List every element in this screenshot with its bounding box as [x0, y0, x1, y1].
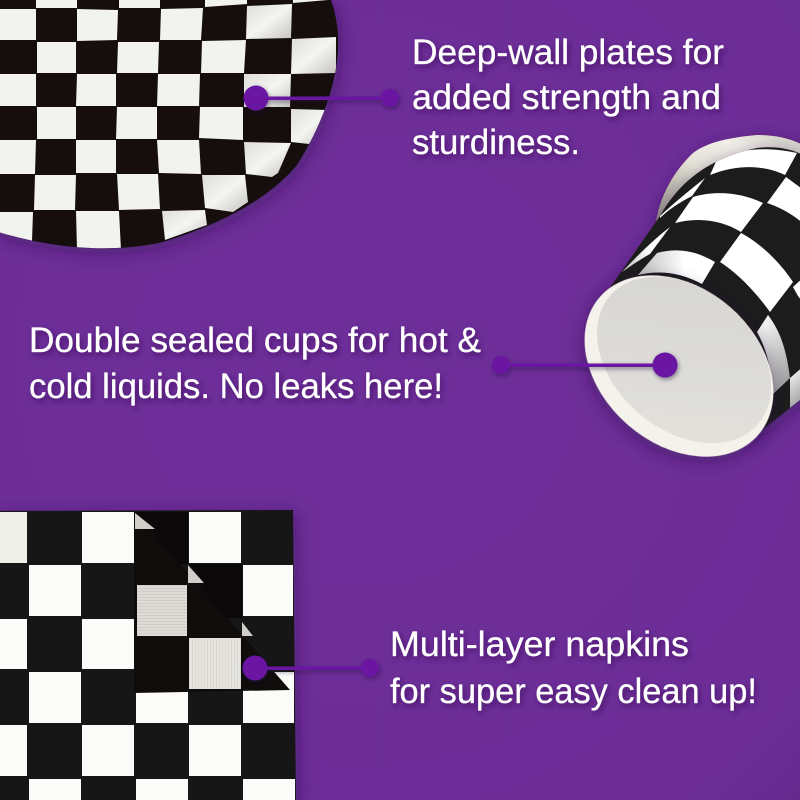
text: plates: Deep-wall plates for	[412, 33, 724, 72]
folded napkin corner	[134, 511, 290, 693]
photo: checkered plate	[0, 0, 338, 250]
text: cups: Double sealed cups for hot &	[29, 321, 481, 360]
photo: checkered paper cup	[576, 132, 800, 468]
text: napkins	[390, 625, 757, 711]
text: plates	[412, 33, 724, 162]
text: cups	[29, 321, 481, 406]
cup base inner disc	[564, 243, 800, 477]
callout: cup marker	[492, 352, 678, 378]
cup body	[598, 147, 800, 438]
cup base	[549, 238, 800, 494]
text: napkins: for super easy clean up!	[390, 672, 757, 711]
text: cups: cold liquids. No leaks here!	[29, 367, 443, 406]
callout: napkin marker	[242, 656, 379, 680]
text: napkins: Multi-layer napkins	[390, 625, 689, 664]
photo: checkered napkin	[0, 510, 296, 800]
cup rim	[656, 135, 800, 222]
text: plates: sturdiness.	[412, 123, 580, 162]
text: plates: added strength and	[412, 78, 721, 117]
callout: plate marker	[244, 86, 399, 110]
